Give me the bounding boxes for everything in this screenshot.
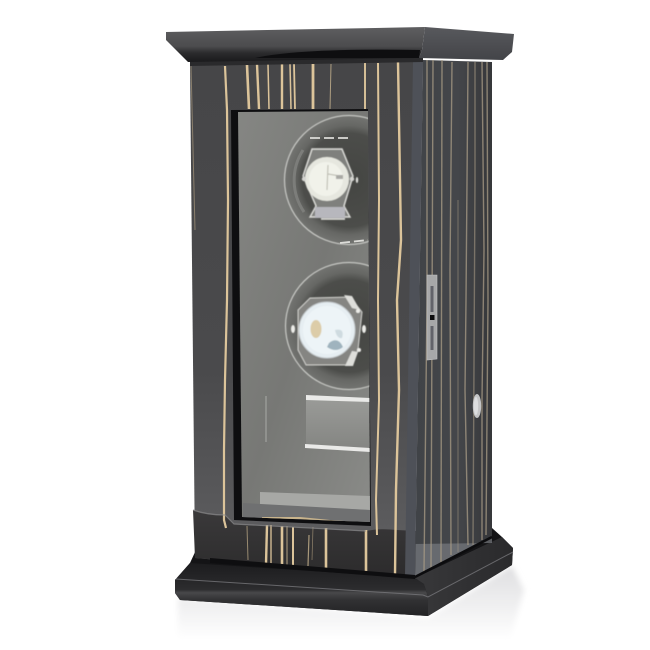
glass xyxy=(238,111,370,522)
door hinge latch xyxy=(427,275,437,360)
dial xyxy=(299,302,355,358)
cabinet base plinth xyxy=(175,528,513,616)
side power button xyxy=(473,394,481,418)
side wood stripes xyxy=(424,60,488,572)
window frame xyxy=(231,109,371,526)
front wood stripes xyxy=(191,62,401,575)
side studs xyxy=(291,325,295,333)
dial xyxy=(305,157,349,201)
cabinet top cap xyxy=(166,27,514,66)
lower winder recess xyxy=(284,262,370,390)
lower gloss highlight line xyxy=(193,510,366,531)
interior reflected parts xyxy=(243,114,370,522)
chamfered right edge xyxy=(405,60,423,577)
cabinet front door panel xyxy=(190,60,423,579)
dark lower gloss panel xyxy=(193,510,416,577)
floor reflection xyxy=(178,566,524,640)
base front face xyxy=(175,563,428,616)
crown studs xyxy=(302,177,306,181)
cap shadow xyxy=(190,57,423,66)
watch case xyxy=(298,297,362,365)
lower glass band xyxy=(243,492,371,524)
body bottom trim xyxy=(210,558,415,579)
cabinet right side panel xyxy=(414,60,492,577)
upper winder recess xyxy=(284,114,369,246)
product photo: watch winder cabinet xyxy=(166,27,524,622)
lower watch xyxy=(291,295,366,366)
lugs and bracelet xyxy=(303,149,353,217)
base right face xyxy=(415,537,513,616)
cap front face xyxy=(166,27,425,62)
upper watch xyxy=(302,149,358,219)
glass door window xyxy=(231,109,371,526)
cap right face xyxy=(419,27,514,60)
skeleton detail xyxy=(310,320,322,338)
drawer panel xyxy=(266,395,371,452)
side bottom shadow edge xyxy=(415,537,492,577)
